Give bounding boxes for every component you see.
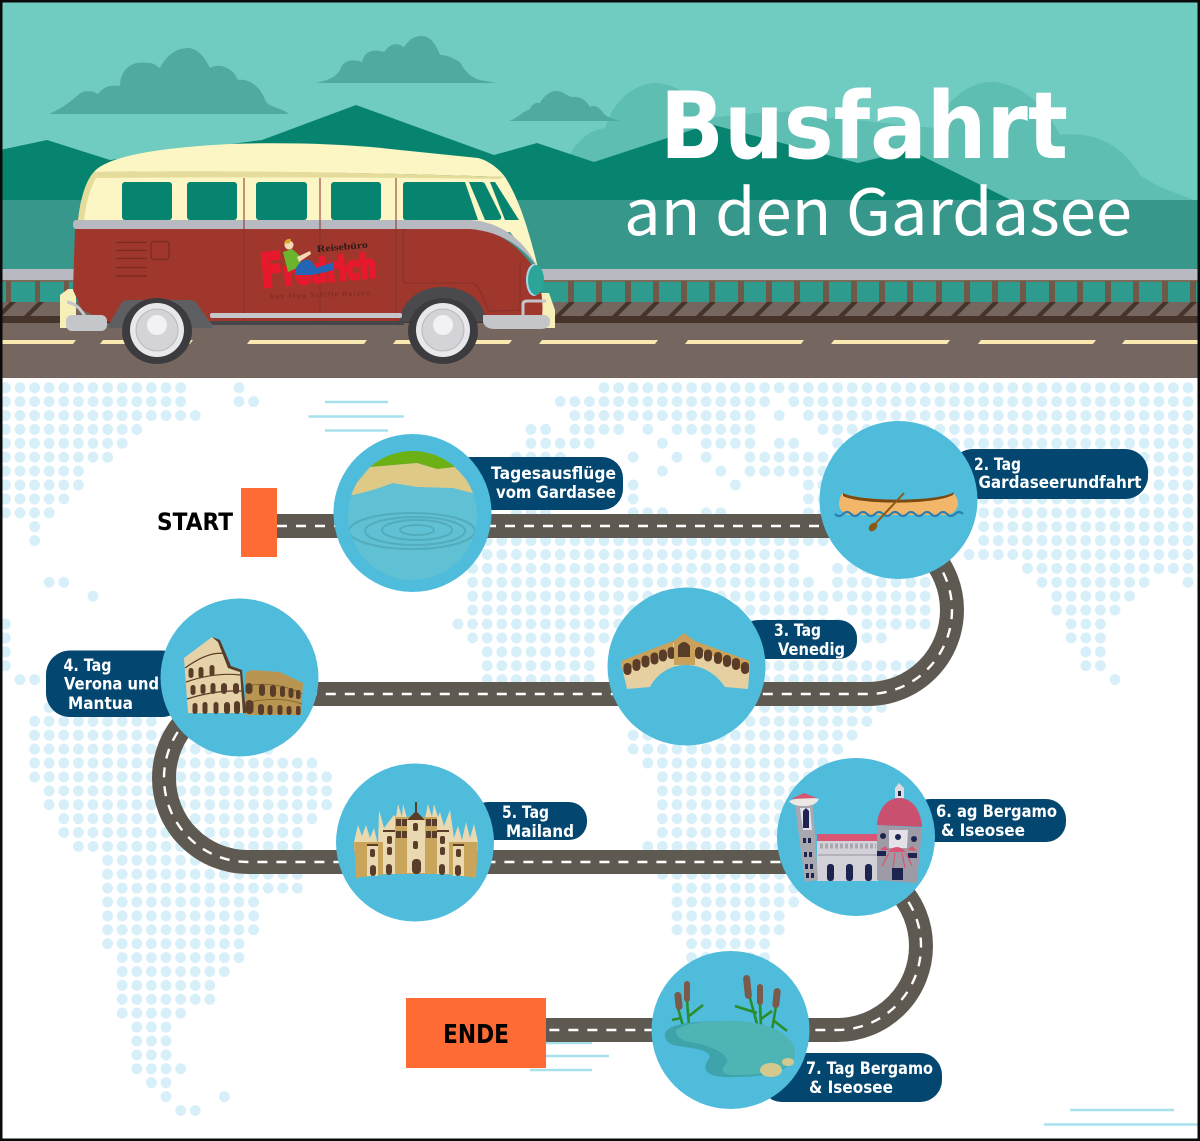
label: 2. Tag: 2. Tag	[974, 455, 1021, 474]
winding road	[164, 526, 952, 1030]
cloud 2	[316, 36, 496, 83]
windows	[122, 182, 519, 220]
label: 6. Tag	[936, 802, 1057, 840]
label: 5. Tag: 5. Tag	[502, 803, 549, 822]
speed lines	[308, 402, 1198, 1124]
icon: Colosseum	[184, 637, 303, 715]
spires	[354, 804, 478, 850]
tan base	[354, 842, 478, 878]
guard rail	[0, 269, 1200, 323]
icon: Milan cathedral	[354, 802, 478, 878]
logo wordmark: Fredrich	[258, 236, 378, 298]
icon: Florence cathedral	[789, 783, 922, 883]
windows and doors	[367, 819, 464, 876]
subtitle: an den Gardasee	[624, 162, 1132, 254]
icon: canoe	[835, 492, 963, 533]
label: START: START	[157, 508, 234, 536]
label: 4. Tag: Verona und	[64, 674, 159, 694]
stop pill backgrounds	[46, 449, 1148, 1102]
bell tower	[795, 805, 818, 882]
label: 6. Tag: & Iseosee	[941, 821, 1025, 840]
cloud 1	[49, 48, 289, 114]
label: 2. Tag: Gardaseerundfahrt	[978, 473, 1142, 492]
wheel arches	[107, 300, 214, 328]
title: Busfahrt	[660, 72, 1068, 180]
headlight	[526, 264, 544, 296]
label: Tagesausfluege	[491, 464, 616, 502]
label: 5. Tag	[502, 803, 574, 841]
icon: lake with ripples	[348, 451, 477, 580]
cream bumper guards	[60, 289, 555, 328]
apse	[877, 825, 922, 883]
dome	[877, 798, 922, 827]
lake band	[0, 200, 1200, 269]
label: Tagesausfluege: Tagesausflüge	[491, 464, 616, 483]
roof	[94, 143, 505, 177]
label: 7. Tag: & Iseosee	[809, 1078, 893, 1097]
side vent	[116, 242, 147, 276]
start marker	[157, 488, 277, 557]
logo small text: Bus Flug Schiffe Reisen	[270, 290, 370, 301]
stop circles	[160, 421, 978, 1109]
label: 4. Tag: 4. Tag	[64, 656, 112, 675]
road	[0, 323, 1200, 378]
label: 5. Tag: Mailand	[506, 822, 574, 841]
label: 2. Tag	[974, 455, 1142, 492]
dotted world map	[0, 381, 1195, 1117]
silver belt line	[73, 220, 538, 268]
mountains	[0, 105, 1015, 202]
rocks	[760, 1063, 782, 1077]
cloud 3	[509, 91, 620, 121]
logo: Reisebuero Fredrich	[258, 236, 378, 301]
label: 7. Tag	[806, 1059, 933, 1097]
label: 3. Tag: Venedig	[778, 640, 845, 659]
label: ENDE: ENDE	[443, 1020, 509, 1050]
logo figure	[283, 239, 334, 275]
label: 3. Tag: 3. Tag	[774, 621, 821, 640]
label: 7. Tag: 7. Tag Bergamo	[806, 1059, 933, 1078]
wheel rear	[122, 298, 192, 364]
nave	[817, 836, 878, 881]
label: 4. Tag: Mantua	[68, 694, 133, 713]
distant light clouds	[565, 82, 1198, 210]
end marker	[406, 998, 546, 1068]
red lower body	[73, 228, 543, 322]
pond	[676, 1021, 795, 1075]
label: 4. Tag	[64, 656, 159, 713]
label: 6. Tag: 6. ag Bergamo	[936, 802, 1057, 821]
lower trim	[212, 321, 404, 325]
wheel front	[408, 298, 478, 364]
icon: Rialto bridge	[621, 633, 750, 689]
bumpers	[67, 302, 85, 316]
panel: header scene	[0, 0, 1200, 378]
label: 3. Tag	[774, 621, 845, 659]
label: Tagesausfluege: vom Gardasee	[496, 483, 616, 502]
cream upper body	[78, 172, 538, 268]
cattails	[674, 975, 781, 1010]
pond shadow	[665, 1021, 795, 1077]
logo tagline: Reisebüro	[317, 241, 369, 255]
roof	[407, 802, 425, 820]
body panel lines	[244, 178, 520, 322]
reeds	[672, 998, 787, 1031]
icon: pond with reeds	[665, 975, 795, 1077]
icon: VW bus	[60, 143, 555, 364]
